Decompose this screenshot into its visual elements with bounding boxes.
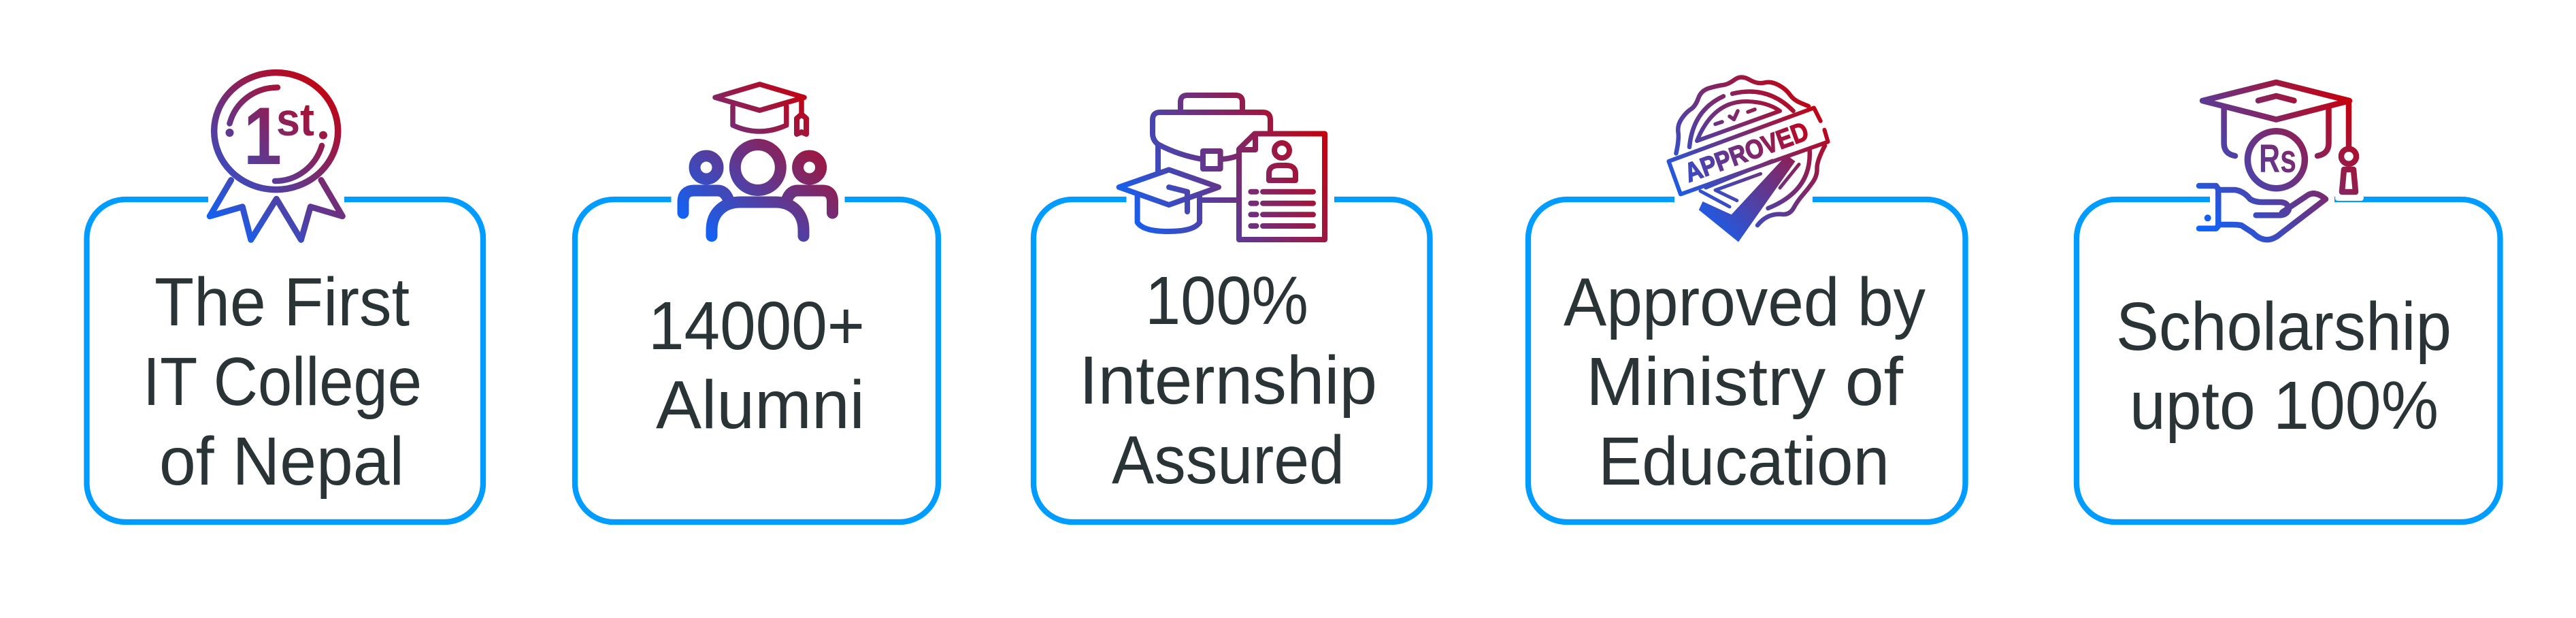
panel: internship [1034,95,1430,522]
card text: The First [154,264,410,340]
icon: first place medal [210,73,342,240]
icon: briefcase, cap and resume [1119,95,1325,240]
card text: 14000+ [648,288,865,364]
card text: Assured [1112,422,1344,498]
icon: first place medal: 1 [244,91,282,182]
card text [2116,289,2451,444]
card outline [2077,199,2500,522]
icon: cap, coin and hand: Rs [2259,137,2296,181]
card text [1079,263,1377,498]
card text: Alumni [656,367,865,443]
icon: graduates group [683,84,833,236]
card text [648,288,865,443]
card text: Ministry of [1586,344,1903,420]
card text: Education [1598,423,1889,500]
card text: Internship [1079,342,1377,419]
icon: cap, coin and hand [2199,82,2364,240]
card outline [1528,199,1965,522]
card text: upto 100% [2130,368,2439,444]
card text: IT College [143,344,422,420]
icon: approved seal [1668,78,1828,242]
icon: first place medal: st [276,94,314,146]
card outline [1034,199,1430,522]
card outline [575,199,938,522]
card text [143,264,422,500]
panel: the first IT college [87,73,483,522]
card outline [87,199,483,522]
panel: approved [1528,78,1965,522]
card text [1564,264,1926,500]
panel: alumni [575,84,938,522]
card text: Scholarship [2116,289,2451,365]
panel: scholarship [2077,82,2500,522]
card text: Approved by [1564,264,1926,340]
card text: 100% [1145,263,1308,339]
icon: approved seal: APPROVED [1681,117,1813,188]
card text: of Nepal [159,423,404,500]
